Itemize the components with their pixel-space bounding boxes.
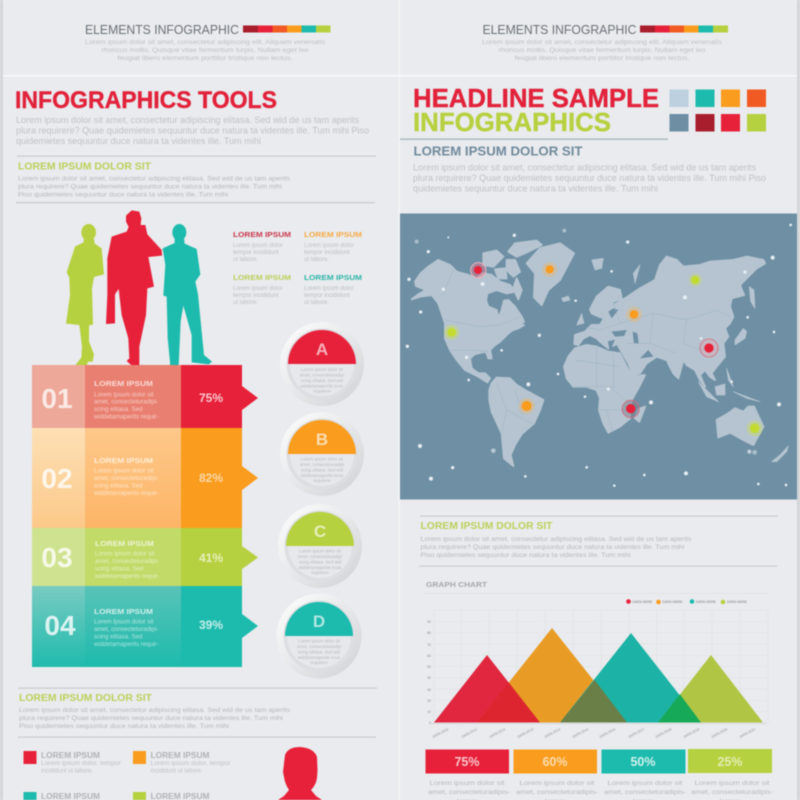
- x axis labels: DATA 2015: [572, 727, 589, 739]
- section: lorem ipsum right: [419, 516, 778, 567]
- label teal: [304, 273, 362, 306]
- title: headline sample infographics: HEADLINE SAMPLE: [413, 85, 659, 113]
- circle badge D: widdetamaperits ecus: [298, 655, 341, 660]
- circle badge C: [278, 504, 362, 588]
- circle badge A: amet, consecteturadipi: [300, 372, 344, 378]
- row 01: 01: [41, 383, 73, 414]
- intro paragraph right: Lorem ipsum dolor sit amet, consectetur adipiscing elitasa. Sed wid de us tam aperits: [413, 162, 756, 174]
- section: lorem ipsum right: LOREM IPSUM DOLOR SIT: [420, 520, 553, 532]
- row 04: LOREM IPSUM: [94, 607, 153, 616]
- silhouette: man in teal: [163, 224, 212, 367]
- circle badge C: widdetamaperits ecus: [299, 565, 342, 570]
- circle badge C: requirere: [311, 570, 329, 575]
- row 03: Lorem Ipsum dolor sit: [95, 550, 155, 558]
- y axis labels: 90: [427, 620, 431, 624]
- row 04: widdetamaperits requir-: [93, 641, 159, 648]
- circle badge C: amet, consecteturadipi: [298, 554, 342, 559]
- world map panel: [400, 214, 797, 500]
- left header: elements infographic: [85, 22, 330, 62]
- colour strip: [640, 26, 728, 32]
- row 03: amet, consecteturadipi-: [95, 558, 159, 565]
- chart legend: [626, 599, 747, 604]
- y axis labels: 70: [427, 643, 431, 647]
- stars: [406, 224, 792, 487]
- circle badge A: widdetamaperits ecus: [301, 384, 344, 388]
- circle badge C: Lorem ipsum dolor sit: [299, 548, 342, 554]
- stat card 60%: 60%: [542, 755, 568, 769]
- x axis labels: DATA 2013: [517, 727, 534, 739]
- x axis labels: DATA 2018: [655, 727, 672, 739]
- label green: ut labore.: [233, 300, 258, 306]
- circle badge B: widdetamaperits ecus: [301, 473, 344, 478]
- chart legend: DATA HERE: [662, 600, 683, 604]
- madagascar: [635, 407, 645, 422]
- left header: elements infographic: feugiat libero elementum porttitor tristique non lectus.: [118, 56, 293, 62]
- row 04: amet, consecteturadipi-: [94, 626, 158, 633]
- y axis labels: 10: [427, 710, 431, 714]
- chart legend: DATA HERE: [727, 600, 747, 604]
- row 03: LOREM IPSUM: [95, 539, 154, 548]
- silhouette: man on phone: [106, 210, 162, 368]
- row 03: scing elitasa. Sed: [95, 566, 144, 572]
- row 02: Lorem Ipsum dolor sit: [94, 468, 154, 474]
- label red: tempor incididunt: [233, 250, 279, 256]
- intro paragraph left: plura requirere? Quae quidemietes sequuntur duce natura ta videntes ille. Tum mihi Piso: [16, 126, 369, 136]
- legend item orange: Lorem ipsum dolor, tempor: [150, 761, 230, 767]
- right header: elements infographic: Lorem ipsum dolor sit amet, consectetur adipiscing elit. Aliquam venenatis: [482, 40, 722, 46]
- row 04: [32, 586, 258, 667]
- section: lorem ipsum top left: Lorem ipsum dolor sit amet, consectetur adipiscing elitasa. Sed wid de us tam aperits: [18, 176, 291, 182]
- title: infographics tools: INFOGRAPHICS TOOLS: [15, 87, 277, 114]
- x axis labels: DATA 2010: [432, 727, 449, 739]
- chart title: GRAPH CHART: [426, 580, 487, 589]
- marker eastern europe: [626, 306, 642, 322]
- circle badge B: scing elitasa. Sed wid: [301, 468, 344, 472]
- left header: elements infographic: rhoncus mollis. Quisque vitae fermentum turpis. Nullam eget leo: [102, 48, 309, 54]
- chart legend: DATA HERE: [696, 600, 716, 604]
- continents: [412, 241, 788, 466]
- row 02: 82%: [199, 471, 223, 485]
- label orange: tempor incididunt: [304, 250, 350, 256]
- left header: elements infographic: ELEMENTS INFOGRAPHIC: [85, 22, 239, 37]
- stat card 25%: [688, 749, 773, 800]
- label red: [233, 230, 291, 263]
- section: lorem ipsum right: plura requirere? Quae quidemietes sequuntur duce natura ta videntes ille. Tum mihi: [420, 544, 684, 551]
- right header: elements infographic: rhoncus mollis. Quisque vitae fermentum turpis. Nullam eget leo: [498, 48, 706, 54]
- legend bottom left: [24, 750, 230, 800]
- y axis labels: 0: [429, 721, 431, 725]
- row 01: [32, 365, 258, 428]
- graph chart: [424, 580, 769, 739]
- y axis labels: 50: [427, 665, 431, 669]
- left header: elements infographic: Lorem ipsum dolor sit amet, consectetur adipiscing elit. Aliquam venenatis: [85, 40, 325, 46]
- row 03: widdetamaperits requir-: [94, 573, 160, 580]
- legend item orange: incididunt ut labore.: [150, 768, 203, 774]
- row 01: scing elitasa. Sed: [94, 406, 143, 413]
- y axis labels: 60: [427, 654, 431, 658]
- marker greenland: [542, 262, 557, 277]
- section: lorem ipsum bottom left: Lorem ipsum dolor sit amet, consectetur adipiscing elitasa. Sed wid de us tam aperits: [19, 707, 291, 714]
- section: lorem ipsum top left: Piso quidemietes sequuntur duce natura ta videntes ille. Tum mihi: [18, 192, 228, 198]
- circle badge D: [276, 594, 362, 678]
- circle badge D: amet, consecteturadipi: [297, 644, 341, 649]
- circle badge D: requirere: [310, 660, 328, 665]
- stat card 60%: Lorem ipsum dolor sit: [520, 780, 595, 787]
- title: headline sample infographics: INFOGRAPHICS: [413, 109, 611, 137]
- marker usa: [444, 325, 459, 340]
- section: lorem ipsum right: Lorem ipsum dolor sit amet, consectetur adipiscing elitasa. Sed wid de us tam aperits: [420, 536, 692, 543]
- label teal: ut labore.: [304, 300, 329, 306]
- row 03: 41%: [199, 551, 223, 565]
- y axis labels: 30: [427, 688, 431, 692]
- circle badge B: amet, consecteturadipi: [300, 462, 344, 467]
- right header: elements infographic: [482, 22, 728, 62]
- circle badge A: A: [316, 340, 328, 359]
- y axis labels: 20: [427, 699, 431, 703]
- small legend: four lorem ipsum labels: [233, 230, 362, 306]
- stat card 75%: [426, 750, 510, 800]
- intro paragraph right: [413, 162, 766, 194]
- label green: tempor incididunt: [233, 293, 279, 299]
- inland seas: [608, 308, 653, 358]
- circle badge B: Lorem ipsum dolor sit: [301, 456, 344, 462]
- stat card 75%: Lorem ipsum dolor sit: [430, 780, 505, 787]
- row 01: Lorem Ipsum dolor sit: [94, 392, 154, 398]
- triangle series: [434, 628, 763, 722]
- x axis labels: DATA 2020: [711, 727, 728, 739]
- marker china: [700, 339, 718, 357]
- row 02: [32, 428, 258, 528]
- label orange: [304, 230, 362, 263]
- label orange: ut labore.: [304, 257, 329, 263]
- silhouettes: three business people: [66, 210, 212, 368]
- stat card 50%: amet, consecteturadipis-: [604, 789, 686, 796]
- section: lorem ipsum top left: LOREM IPSUM DOLOR SIT: [18, 160, 152, 172]
- section: lorem ipsum bottom left: LOREM IPSUM DOLOR SIT: [19, 692, 153, 704]
- circle badge B: requirere: [313, 478, 331, 483]
- section: lorem ipsum right: Piso quidemietes sequuntur duce natura ta videntes ille. Tum mihi: [420, 552, 630, 559]
- africa: [564, 345, 645, 433]
- circle badge C: C: [314, 522, 326, 541]
- label red: LOREM IPSUM: [233, 230, 291, 239]
- circle badge A: requirere: [313, 388, 331, 394]
- row 04: 04: [44, 610, 76, 641]
- label green: LOREM IPSUM: [233, 273, 291, 282]
- x axis labels: DATA 2021: [739, 727, 756, 739]
- intro paragraph left: [16, 115, 369, 147]
- marker canada: [471, 263, 486, 278]
- australia: [717, 407, 763, 445]
- label green: Lorem ipsum dolor: [233, 286, 283, 292]
- label orange: LOREM IPSUM: [304, 230, 362, 239]
- x axis labels: DATA 2011: [461, 727, 478, 739]
- country borders: [442, 270, 730, 433]
- stat card 25%: Lorem ipsum dolor sit: [694, 780, 770, 787]
- circle badge B: [280, 412, 364, 496]
- stat card 75%: amet, consecteturadipis-: [428, 789, 510, 796]
- stat card 75%: 75%: [454, 755, 480, 769]
- intro paragraph right: quidemietes sequuntur duce natura ta videntes ille. Tum mihi: [413, 184, 658, 194]
- colour swatches: [670, 90, 766, 132]
- x axis labels: DATA 2017: [628, 727, 645, 739]
- y axis labels: [427, 620, 431, 725]
- legend item orange: [133, 750, 230, 774]
- row 04: 39%: [199, 618, 223, 632]
- section: lorem ipsum bottom left: Piso quidemietes sequuntur duce natura ta videntes ille. Tum mihi: [19, 723, 229, 730]
- row 02: scing elitasa. Sed: [94, 482, 143, 490]
- stat card 25%: amet, consecteturadipis-: [691, 789, 773, 796]
- label red: ut labore.: [233, 257, 258, 263]
- arctic islands: [483, 241, 542, 299]
- x axis labels: [432, 727, 756, 739]
- y axis labels: 80: [427, 631, 431, 635]
- subheading right: LOREM IPSUM DOLOR SIT: [414, 144, 583, 158]
- north america: [412, 260, 524, 382]
- label teal: tempor incididunt: [304, 293, 350, 299]
- label red: Lorem ipsum dolor: [233, 243, 283, 249]
- islands: [562, 258, 788, 462]
- row 02: amet, consecteturadipi-: [94, 475, 158, 482]
- silhouette: woman: [66, 224, 104, 366]
- row 03: 03: [41, 542, 73, 573]
- row 01: LOREM IPSUM: [94, 379, 153, 388]
- x axis labels: DATA 2012: [489, 727, 506, 739]
- stat card 50%: [602, 750, 686, 800]
- x axis labels: DATA 2016: [599, 727, 616, 739]
- row 02: 02: [41, 463, 73, 494]
- label orange: Lorem ipsum dolor: [304, 243, 354, 249]
- row 02: LOREM IPSUM: [94, 456, 153, 465]
- marker russia: [689, 273, 702, 287]
- circle badge B: B: [316, 430, 328, 449]
- legend item red: [24, 750, 121, 774]
- legend item red: LOREM IPSUM: [41, 750, 100, 760]
- label green: [233, 273, 291, 306]
- circle badge D: Lorem ipsum dolor sit: [298, 638, 341, 644]
- stat card 50%: Lorem ipsum dolor sit: [608, 780, 683, 787]
- south america: [489, 378, 543, 466]
- title: headline sample infographics: [413, 85, 659, 137]
- intro paragraph right: plura requirere? Quae quidemietes sequuntur duce natura ta videntes ille. Tum mihi Piso: [413, 173, 766, 184]
- label teal: LOREM IPSUM: [304, 273, 362, 282]
- circle badge A: Lorem ipsum dolor sit: [301, 367, 344, 372]
- circle badge D: D: [313, 612, 325, 631]
- row 04: scing elitasa. Sed: [94, 634, 143, 640]
- y axis labels: 40: [427, 676, 431, 680]
- row 03: [32, 528, 258, 586]
- row 01: widdetamaperits requir-: [93, 414, 159, 420]
- section: lorem ipsum bottom left: [18, 688, 377, 738]
- section: lorem ipsum bottom left: plura requirere? Quae quidemietes sequuntur duce natura ta videntes ille. Tum mihi: [19, 715, 283, 722]
- legend item red: incididunt ut labore.: [41, 768, 93, 774]
- right header: elements infographic: feugiat libero elementum porttitor tristique non lectus.: [514, 56, 690, 62]
- stat card 60%: [514, 750, 598, 800]
- section: lorem ipsum top left: [16, 156, 376, 203]
- row 02: widdetamaperits requir-: [93, 490, 159, 497]
- x axis labels: DATA 2014: [544, 727, 561, 739]
- row 01: amet, consecteturadipi-: [94, 398, 158, 406]
- label teal: Lorem ipsum dolor: [304, 286, 354, 292]
- stacked table: 01 to 04: [32, 365, 258, 667]
- right header: elements infographic: ELEMENTS INFOGRAPHIC: [482, 22, 636, 37]
- circle badge C: scing elitasa. Sed wid: [299, 560, 342, 564]
- eurasia: [574, 257, 765, 387]
- circle badge D: scing elitasa. Sed wid: [298, 650, 341, 654]
- circle badge A: [280, 322, 364, 406]
- x axis labels: DATA 2019: [683, 727, 700, 739]
- stat card 50%: 50%: [630, 755, 656, 769]
- row 01: 75%: [199, 391, 223, 405]
- legend item red: Lorem ipsum dolor, tempor: [41, 761, 121, 767]
- marker australia: [747, 420, 763, 436]
- chart legend: DATA HERE: [632, 600, 653, 604]
- stat card 60%: amet, consecteturadipis-: [516, 789, 598, 796]
- marker mozambique: [622, 400, 639, 418]
- section: lorem ipsum top left: plura requirere? Quae quidemietes sequuntur duce natura ta videntes ille. Tum mihi: [18, 184, 282, 190]
- greenland: [527, 243, 574, 305]
- chart grid: [434, 610, 768, 723]
- row 04: Lorem Ipsum dolor sit: [94, 618, 154, 626]
- silhouette: head and shoulders: [278, 747, 322, 800]
- map markers: [444, 262, 763, 436]
- intro paragraph left: Lorem ipsum dolor sit amet, consectetur adipiscing elitasa. Sed wid de us tam aperits: [16, 115, 359, 126]
- marker brazil: [519, 398, 535, 414]
- stat card 25%: 25%: [717, 755, 743, 769]
- colour strip: [243, 26, 330, 32]
- legend item orange: LOREM IPSUM: [150, 750, 210, 760]
- intro paragraph left: quidemietes sequuntur duce natura ta videntes ille. Tum mihi: [16, 136, 261, 147]
- circle badge A: scing elitasa. Sed wid: [301, 378, 344, 383]
